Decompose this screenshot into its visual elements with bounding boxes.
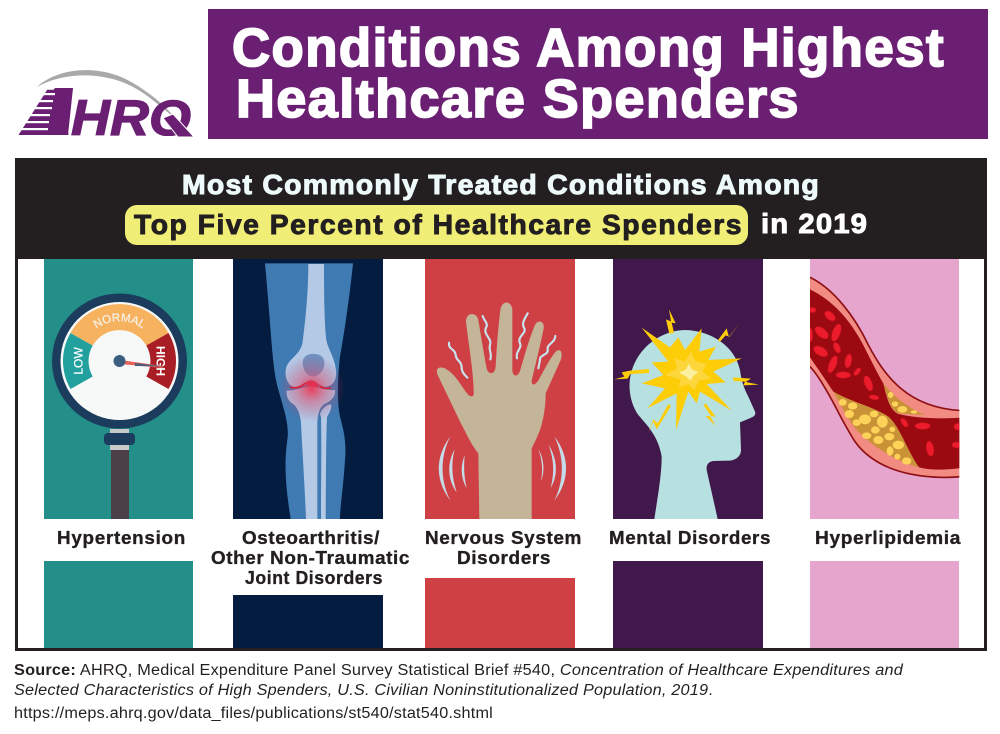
panel: hypertension: [44, 259, 193, 648]
icon: artery with plaque: [803, 274, 967, 477]
title banner: Conditions Among Highest: [232, 18, 945, 78]
panel: osteoarthritis: [211, 259, 410, 648]
title banner: [208, 9, 988, 139]
icon: blood pressure gauge: NORMAL: [92, 313, 144, 328]
heading: most commonly treated conditions: [125, 169, 868, 245]
icon: blood pressure gauge: LOW: [72, 347, 86, 375]
panel: nervous system disorders: [425, 259, 582, 648]
label: nervous system disorders: Disorders: [457, 547, 551, 568]
icon: blood pressure gauge: [52, 294, 187, 519]
label: hypertension: Hypertension: [57, 527, 186, 548]
icon: head with burst: [614, 309, 759, 519]
logo: AHRQ: HRQ: [71, 90, 191, 146]
heading: most commonly treated conditions: Most Commonly Treated Conditions Among: [182, 169, 820, 200]
icon: blood pressure gauge: HIGH: [154, 346, 168, 376]
source note: https://meps.ahrq.gov/data_files/publications/st540/stat540.shtml: [14, 705, 493, 722]
icon: knee x-ray: [265, 263, 353, 519]
icon: trembling hand: [437, 302, 566, 519]
source note: Selected Characteristics of High Spenders, U.S. Civilian Noninstitutionalized Population, 2019 .: [14, 682, 713, 699]
title banner: Healthcare Spenders: [236, 69, 800, 129]
label: nervous system disorders: Nervous System: [425, 527, 582, 548]
panel: hyperlipidemia: [803, 259, 967, 648]
label: osteoarthritis: Other Non-Traumatic: [211, 547, 410, 568]
panel: white interior: [18, 259, 984, 648]
label: osteoarthritis: Osteoarthritis/: [242, 527, 380, 548]
label: nervous system disorders: [425, 527, 582, 568]
logo: AHRQ: [18, 70, 193, 136]
source note: Source: AHRQ, Medical Expenditure Panel Survey Statistical Brief #540, Concentration of Healthcare Expenditures and: [14, 662, 904, 679]
logo: AHRQ: A: [18, 75, 74, 149]
label: mental disorders: Mental Disorders: [609, 527, 771, 548]
heading: most commonly treated conditions: in 2019: [761, 208, 868, 239]
panel: conditions frame: [15, 158, 987, 651]
panel: mental disorders: [609, 259, 771, 648]
heading: most commonly treated conditions: Top Five Percent of Healthcare Spenders: [134, 209, 743, 240]
source note: [14, 662, 904, 722]
label: osteoarthritis: Joint Disorders: [245, 567, 383, 588]
label: osteoarthritis: [211, 527, 410, 588]
label: hyperlipidemia: Hyperlipidemia: [815, 527, 961, 548]
